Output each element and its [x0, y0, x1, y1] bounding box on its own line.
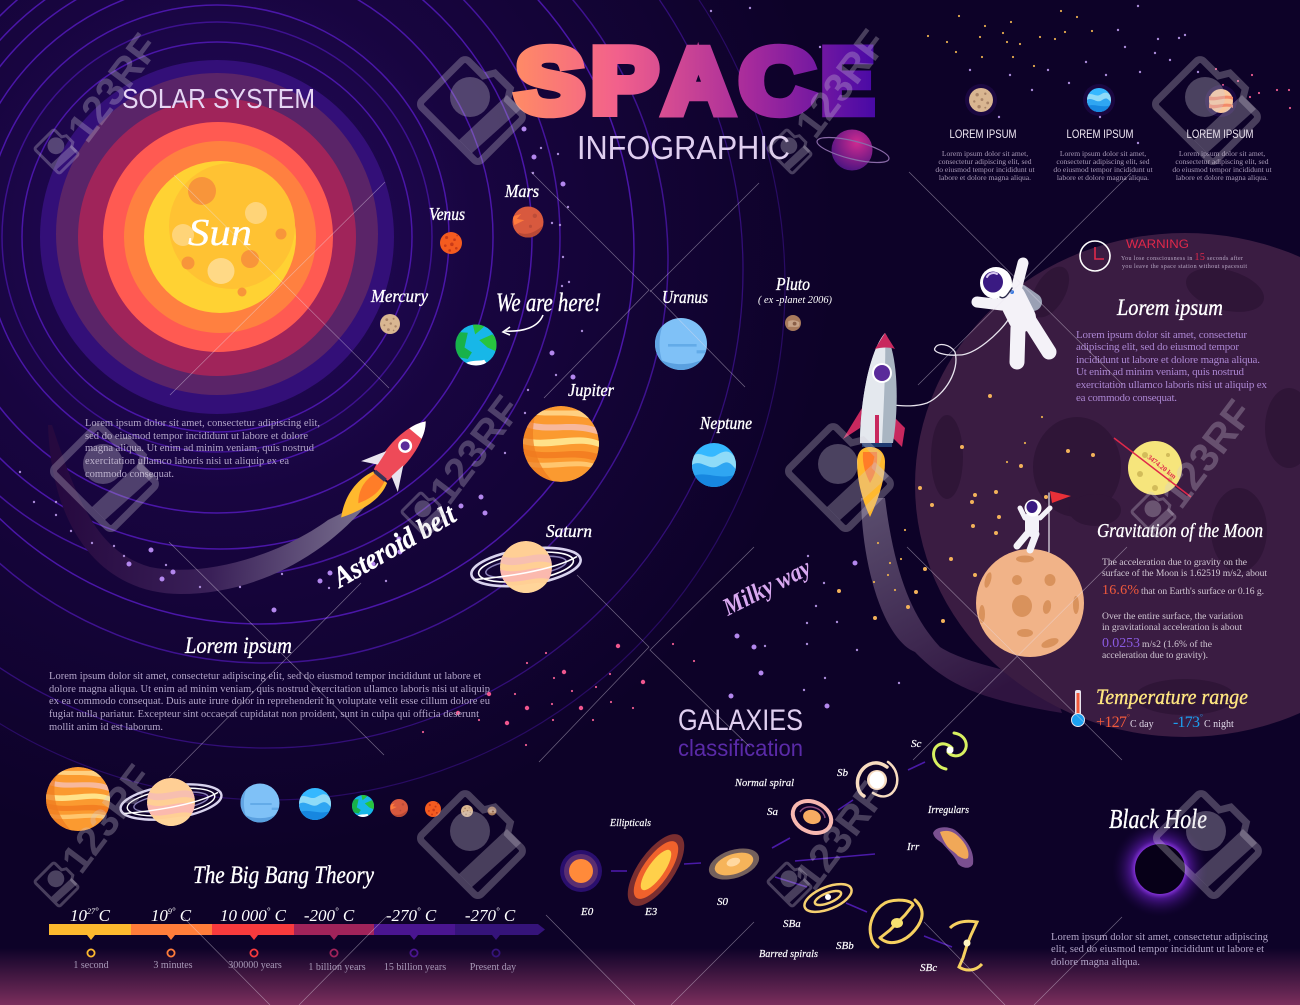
text block: black hole description: Lorem ipsum dolor sit amet, consectetur adipiscing: [1051, 932, 1269, 943]
orbits of the solar system: [0, 0, 785, 800]
planet: neptune: [692, 413, 752, 487]
planet: mercury: Mercury: [370, 286, 428, 306]
panel: lorem ipsum on moon: ea commodo consequat.: [1076, 392, 1177, 404]
timeline captions: 1 second: [73, 960, 109, 971]
icon: astronaut with flag: [1017, 491, 1071, 552]
panel: temperature range: [1072, 684, 1248, 731]
temperature labels: 27: [87, 907, 96, 916]
galaxy: Sa: Sa: [767, 806, 778, 818]
top info: three planets: labore et dolore magna aliqua.: [1176, 173, 1268, 182]
text block: black hole description: [1051, 932, 1269, 968]
panel: gravitation of the moon: m/s2 (1.6% of the: [1142, 639, 1212, 650]
planet: jupiter: Jupiter: [568, 380, 615, 400]
top info: three planets: LOREM IPSUM: [950, 127, 1016, 141]
galaxy: irregular: Irr: [906, 841, 920, 853]
stars: gold specks: [874, 11, 1092, 590]
icon: yellow moon with diameter: [1114, 438, 1191, 497]
top info: three planets: LOREM IPSUM: [1186, 127, 1254, 141]
watermarks: 123RF: [421, 388, 530, 512]
timeline captions: Present day: [470, 962, 516, 973]
icon: floating astronaut: [977, 263, 1049, 362]
galaxy: Sb: Sb: [837, 767, 848, 779]
label: asteroid belt: Asteroid belt: [326, 498, 462, 595]
text block: black hole description: elit, sed do eiusmod tempor incididunt ut labore et: [1051, 944, 1264, 955]
text block: sun description: exercitation ullamco laboris nisi ut aliquip ex ea: [85, 456, 289, 467]
temperature labels: °: [417, 906, 421, 916]
title: SPACE: S: [516, 30, 584, 132]
planet: venus: [429, 204, 465, 254]
heading: the big bang theory: The Big Bang Theory: [193, 862, 375, 889]
panel: temperature range: °: [1200, 713, 1203, 721]
temperature labels: 10: [70, 906, 87, 925]
top info: three planets: Lorem ipsum dolor sit amet,: [1060, 149, 1146, 158]
galaxy: SBc: SBc: [920, 962, 937, 974]
panel: gravitation of the moon: surface of the Moon is 1.62519 m/s2, about: [1102, 568, 1267, 579]
heading: solar system: SOLAR SYSTEM: [122, 83, 315, 114]
panel: lorem ipsum on moon: incididunt ut labore et dolore magna aliqua.: [1076, 354, 1260, 366]
planet: pluto: Pluto: [775, 274, 810, 294]
panel: lorem ipsum text: mollit anim id est laborum.: [49, 722, 163, 733]
stars: small lavender: [20, 6, 1198, 690]
panel: temperature range: C night: [1204, 719, 1234, 730]
panel: gravitation of the moon: that on Earth's surface or 0.16 g.: [1141, 586, 1264, 597]
temperature labels: C: [176, 906, 192, 925]
temperature labels: -200: [304, 906, 335, 925]
temperature labels: 10: [151, 906, 168, 925]
galaxy: elliptical E3: E3: [644, 906, 658, 918]
timeline captions: 300000 years: [228, 960, 282, 971]
top info: three planets: consectetur adipiscing elit, sed: [1175, 157, 1269, 166]
watermarks: 123RF: [1153, 392, 1262, 516]
planet: mars: [504, 181, 544, 238]
planet: uranus: Uranus: [662, 287, 708, 307]
stars: small pink: [423, 69, 1290, 745]
top info: three planets: do eiusmod tempor incididunt ut: [935, 165, 1035, 174]
planet: saturn: Saturn: [546, 521, 592, 541]
galaxy: elliptical E3: [617, 825, 695, 918]
planet: pluto: ( ex -planet 2006): [758, 295, 833, 306]
panel: lorem ipsum text: Lorem ipsum dolor sit amet, consectetur adipiscing elit, sed do eiusmod tempor incididunt ut labore et: [49, 671, 481, 682]
watermark crossing lines: [169, 172, 1131, 1005]
stars: pink field: [458, 646, 643, 723]
temperature labels: °: [95, 906, 99, 916]
panel: gravitation of the moon: 16.6%: [1102, 583, 1139, 598]
panel: lorem ipsum text: [49, 633, 491, 733]
planet: neptune: Neptune: [699, 413, 752, 433]
top info: three planets: [935, 84, 1272, 182]
watermarks: 123RF: [59, 26, 168, 150]
galaxy: SBc: [920, 921, 982, 974]
title: SPACE: P: [591, 30, 658, 132]
panel: gravitation of the moon: acceleration due to gravity).: [1102, 650, 1208, 661]
label: normal spiral: Normal spiral: [734, 777, 794, 789]
timeline captions: 3 minutes: [153, 960, 193, 971]
galaxy: S0: [705, 843, 763, 908]
text block: sun description: magna aliqua. Ut enim ad minim veniam, quis nostrud: [85, 443, 315, 454]
heading: galaxies classification: [678, 704, 803, 761]
panel: lorem ipsum on moon: [1076, 295, 1268, 404]
top info: three planets: labore et dolore magna aliqua.: [939, 173, 1031, 182]
galaxy: S0: S0: [717, 896, 728, 908]
warning callout: WARNING: [1126, 239, 1189, 251]
panel: temperature range: °: [1127, 713, 1130, 721]
timeline captions: 1 billion years: [308, 962, 366, 973]
panel: lorem ipsum on moon: Ut enim ad minim veniam, quis nostrud: [1076, 366, 1244, 378]
title: SPACE: A: [664, 30, 734, 132]
text block: black hole description: dolore magna aliqua.: [1051, 957, 1140, 968]
panel: gravitation of the moon: in gravitational acceleration is about: [1102, 622, 1242, 633]
panel: gravitation of the moon: The acceleration due to gravity on the: [1102, 557, 1247, 568]
temperature labels: 9: [168, 907, 172, 916]
heading: galaxies classification: GALAXIES: [678, 704, 803, 737]
planet: venus: Venus: [429, 204, 465, 224]
temperature labels: [70, 906, 516, 925]
panel: gravitation of the moon: [1097, 520, 1267, 661]
temperature labels: C: [421, 906, 437, 925]
watermarks: 123RF: [786, 774, 895, 898]
panel: temperature range: +127: [1096, 714, 1127, 731]
temperature labels: °: [496, 906, 500, 916]
planet: uranus: [655, 287, 712, 370]
rocket trail: left: [48, 425, 372, 594]
galaxy: Sb: [837, 762, 897, 796]
text block: sun description: commodo consequat.: [85, 469, 174, 480]
tether: [893, 320, 1008, 406]
watermarks: 123RF: [53, 757, 162, 881]
panel: lorem ipsum on moon: adipiscing elit, sed do eiusmod tempor: [1076, 341, 1239, 353]
panel: temperature range: -173: [1173, 714, 1200, 731]
label: barred spirals: Barred spirals: [759, 948, 818, 960]
sun: [40, 60, 394, 414]
galaxy: SBb: SBb: [836, 940, 854, 952]
panel: gravitation of the moon: Over the entire surface, the variation: [1102, 611, 1243, 622]
black hole: Black Hole: [1109, 804, 1207, 834]
galaxy: SBa: SBa: [783, 918, 801, 930]
heading: galaxies classification: classification: [678, 735, 803, 761]
panel: lorem ipsum text: dolore magna aliqua. Ut enim ad minim veniam, quis nostrud exercitation ullamco laboris nisi ut aliquip: [49, 684, 490, 695]
planet: pluto: [758, 274, 833, 331]
planet: saturn: [469, 521, 592, 593]
temperature labels: -270: [386, 906, 417, 925]
warning callout: You lose consciousness in 15 seconds after: [1121, 252, 1243, 263]
galaxy: irregular: [906, 827, 973, 868]
galaxy: Sc: Sc: [911, 738, 922, 750]
warning callout: [1080, 239, 1247, 271]
temperature labels: C: [270, 906, 287, 925]
icon: purple ringed planet: [815, 130, 891, 170]
panel: gravitation of the moon: Gravitation of the Moon: [1097, 520, 1263, 542]
text block: sun description: Lorem ipsum dolor sit amet, consectetur adipiscing elit,: [85, 418, 320, 429]
label: sun: Sun: [188, 212, 252, 254]
galaxy: Sc: [911, 733, 966, 769]
planet: jupiter: [523, 380, 615, 482]
galaxy: Sa: [767, 795, 836, 839]
timeline bar: [49, 924, 545, 957]
panel: lorem ipsum on moon: exercitation ullamco laboris nisi ut aliquip ex: [1076, 379, 1268, 391]
planet: earth with callout: We are here!: [496, 288, 601, 317]
top info: three planets: Lorem ipsum dolor sit amet,: [942, 149, 1028, 158]
temperature labels: 10 000: [220, 906, 267, 925]
galaxy: elliptical E0: E0: [580, 906, 594, 918]
top info: three planets: consectetur adipiscing elit, sed: [938, 157, 1032, 166]
top info: three planets: do eiusmod tempor incididunt ut: [1053, 165, 1153, 174]
label: irregulars: Irregulars: [927, 804, 969, 816]
top info: three planets: LOREM IPSUM: [1066, 127, 1134, 141]
temperature labels: C: [339, 906, 355, 925]
temperature labels: -270: [465, 906, 496, 925]
planet: mercury: [370, 286, 428, 334]
temperature labels: °: [335, 906, 339, 916]
warning callout: you leave the space station without spacesuit: [1122, 264, 1247, 270]
icon: right rocket: [843, 333, 905, 517]
black hole: [1109, 804, 1208, 917]
panel: temperature range: Temperature range: [1096, 684, 1248, 709]
temperature labels: °: [267, 906, 271, 916]
icon: left rocket: [325, 406, 444, 535]
stars: lavender field: [129, 129, 855, 706]
icon: moon with astronaut: [976, 549, 1084, 657]
panel: lorem ipsum on moon: Lorem ipsum dolor sit amet, consectetur: [1076, 329, 1247, 341]
title: SPACE: C: [740, 30, 814, 132]
temperature labels: C: [99, 906, 111, 925]
panel: lorem ipsum text: Lorem ipsum: [184, 633, 292, 658]
rocket trail: right: [861, 498, 1062, 713]
top info: three planets: Lorem ipsum dolor sit amet,: [1179, 149, 1265, 158]
temperature labels: °: [172, 906, 176, 916]
planet: earth with callout: [456, 288, 601, 366]
text block: sun description: [85, 418, 320, 480]
stars: gold dust on moon: [839, 396, 1093, 621]
panel: gravitation of the moon: 0.0253: [1102, 636, 1140, 651]
planet: mars: Mars: [504, 181, 539, 201]
panel: temperature range: C day: [1130, 719, 1154, 730]
big moon backdrop: [915, 233, 1300, 737]
panel: lorem ipsum text: ex ea commodo consequat. Duis aute irure dolor in reprehenderit in voluptate velit esse cillum dolore eu: [49, 696, 491, 707]
galaxy: SBa: [783, 878, 855, 930]
galaxy connectors: [611, 762, 952, 947]
top info: three planets: labore et dolore magna aliqua.: [1057, 173, 1149, 182]
label: milky way: Milky way: [718, 554, 816, 622]
panel: lorem ipsum text: fugiat nulla pariatur. Excepteur sint occaecat cupidatat non proident, sunt in culpa qui officia deserunt: [49, 709, 479, 720]
title: SPACE: [516, 30, 874, 132]
panel: lorem ipsum on moon: Lorem ipsum: [1116, 295, 1223, 320]
text block: sun description: sed do eiusmod tempor incididunt ut labore et dolore: [85, 431, 308, 442]
timeline captions: 15 billion years: [384, 962, 446, 973]
title: SPACE: E: [821, 30, 874, 132]
label: ellipticals: Ellipticals: [609, 817, 651, 829]
icon: yellow moon with diameter: 3474.20 km: [1146, 453, 1178, 481]
timeline captions: [73, 960, 516, 973]
watermarks: 123RF: [787, 22, 896, 146]
top info: three planets: consectetur adipiscing elit, sed: [1056, 157, 1150, 166]
top info: three planets: do eiusmod tempor incididunt ut: [1172, 165, 1272, 174]
galaxy: elliptical E0: [560, 850, 602, 918]
temperature labels: C: [500, 906, 516, 925]
row of planets: [46, 767, 496, 831]
subtitle: infographic: INFOGRAPHIC: [577, 129, 790, 166]
galaxy: SBb: [836, 900, 922, 952]
